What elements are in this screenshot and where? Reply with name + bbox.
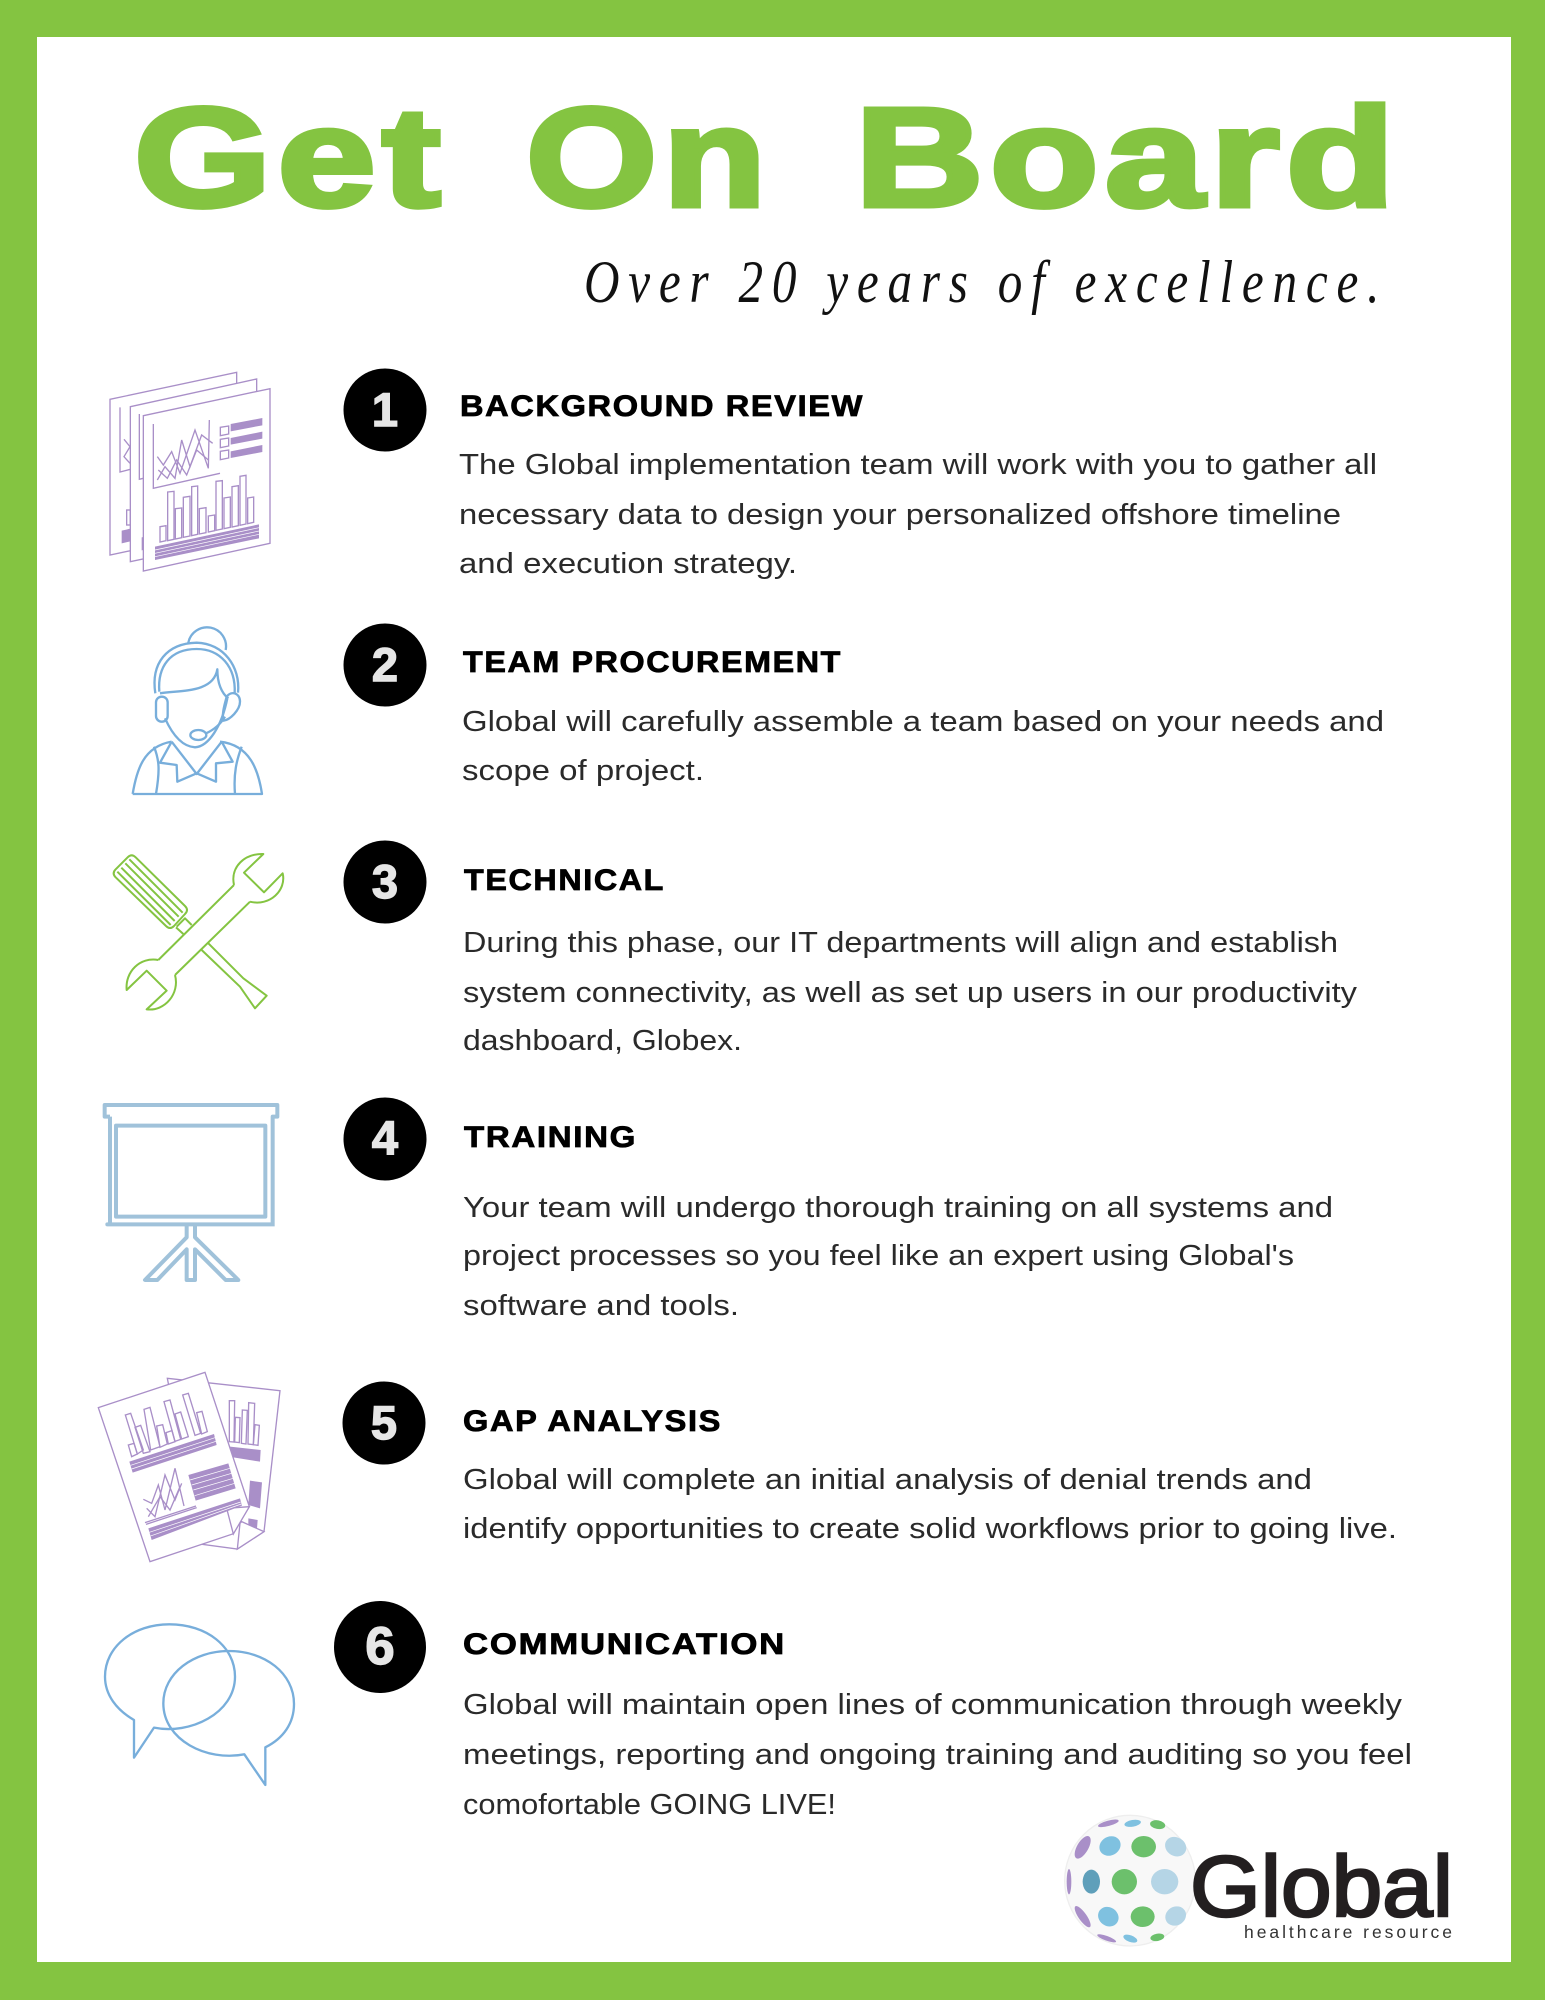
- body text 2: Global will carefully assemble a team based on your needs and: [462, 706, 1384, 738]
- heading: training: TRAINING: [464, 1121, 637, 1154]
- body text 5: Global will complete an initial analysis of denial trends and: [463, 1464, 1312, 1496]
- number badge 6: 6: [365, 1617, 395, 1676]
- icon: scattered report pages: [98, 1372, 280, 1562]
- heading: gap analysis: GAP ANALYSIS: [463, 1405, 722, 1438]
- title: [134, 78, 1401, 236]
- body text 1: necessary data to design your personalized offshore timeline: [459, 499, 1341, 531]
- icon: speech bubbles: [105, 1624, 294, 1785]
- body text 3: During this phase, our IT departments will align and establish: [463, 927, 1338, 959]
- body text 4: project processes so you feel like an expert using Global's: [463, 1240, 1294, 1272]
- step 3 panel: [114, 840, 1358, 1057]
- heading: communication: COMMUNICATION: [463, 1628, 786, 1661]
- number badge 3: 3: [372, 855, 398, 908]
- step 4 panel: [105, 1098, 1333, 1322]
- heading: technical: TECHNICAL: [464, 864, 665, 897]
- body text 5: identify opportunities to create solid workflows prior to going live.: [463, 1513, 1397, 1545]
- body text 6: [463, 1689, 1412, 1821]
- step 1 panel: [110, 368, 1377, 580]
- icon: stacked report pages: [110, 372, 270, 571]
- step 5 panel: [98, 1372, 1397, 1562]
- body text 1: [459, 449, 1377, 580]
- body text 6: Global will maintain open lines of communication through weekly: [463, 1689, 1403, 1721]
- logo: Global healthcare resource: [1065, 1815, 1453, 1946]
- number badge 1: [344, 368, 426, 452]
- number badge 3: [344, 840, 426, 924]
- body text 3: dashboard, Globex.: [463, 1025, 742, 1057]
- body text 2: scope of project.: [462, 755, 704, 787]
- heading: team procurement: TEAM PROCUREMENT: [463, 646, 842, 679]
- logo wordmark: Global: [1190, 1839, 1453, 1935]
- icon: projection screen: [105, 1105, 277, 1280]
- number badge 2: [344, 624, 426, 706]
- body text 5: [463, 1464, 1397, 1545]
- number badge 5: [342, 1382, 426, 1464]
- logo globe: [1065, 1815, 1195, 1946]
- body text 1: The Global implementation team will work with you to gather all: [459, 449, 1377, 481]
- step 2 panel: [133, 624, 1384, 794]
- title: On: [526, 78, 772, 236]
- body text 4: [463, 1192, 1333, 1322]
- number badge 6: [334, 1601, 426, 1693]
- body text 4: Your team will undergo thorough training on all systems and: [463, 1192, 1333, 1224]
- logo tagline: healthcare resource: [1244, 1922, 1452, 1942]
- title: Get: [134, 78, 447, 236]
- body text 3: [463, 927, 1358, 1057]
- body text 6: comofortable GOING LIVE!: [463, 1789, 836, 1821]
- number badge 1: 1: [372, 383, 398, 436]
- step 6 panel: [105, 1601, 1412, 1821]
- number badge 5: 5: [371, 1396, 397, 1449]
- number badge 4: 4: [372, 1111, 398, 1164]
- body text 4: software and tools.: [463, 1290, 739, 1322]
- title: Board: [855, 78, 1401, 236]
- icon: headset agent: [133, 627, 262, 794]
- body text 6: meetings, reporting and ongoing training and auditing so you feel: [463, 1739, 1412, 1771]
- body text 2: [462, 706, 1384, 787]
- number badge 2: 2: [372, 638, 398, 691]
- body text 3: system connectivity, as well as set up users in our productivity: [463, 977, 1358, 1009]
- icon: crossed screwdriver and wrench: [114, 854, 283, 1010]
- body text 1: and execution strategy.: [459, 548, 797, 580]
- subtitle: script tagline: Over 20 years of excellence.: [584, 248, 1379, 315]
- number badge 4: [344, 1098, 426, 1180]
- heading: background review: BACKGROUND REVIEW: [460, 390, 864, 423]
